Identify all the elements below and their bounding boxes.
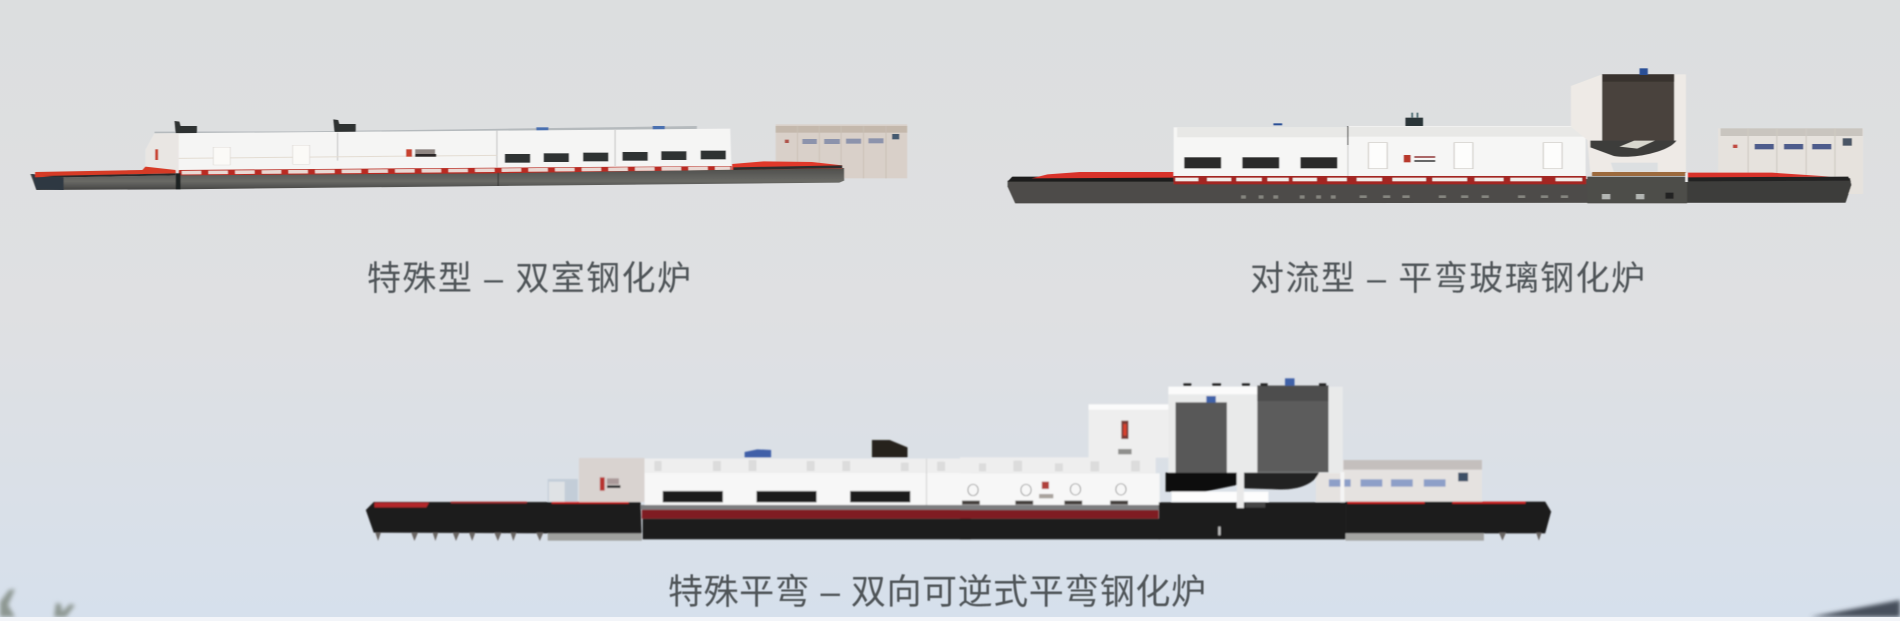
loading housing: [548, 479, 578, 502]
chamber doors: [1368, 143, 1562, 169]
quench tower casing: [1089, 378, 1344, 507]
furnace: convection: [1008, 68, 1863, 203]
door dials: [968, 484, 1126, 496]
control cabinet: [776, 124, 907, 178]
chamber windows: [1184, 157, 1337, 168]
blue fittings: [536, 126, 665, 131]
brand logo: [1404, 155, 1435, 162]
loading table, red top: [35, 167, 176, 177]
background roof, bottom right: [1810, 600, 1900, 617]
steel base: [1008, 178, 1851, 203]
quench base: [1159, 502, 1346, 539]
roof tabs: [979, 461, 1140, 471]
exhaust stack: [1405, 113, 1423, 126]
blue fittings: [1206, 396, 1216, 403]
unloading table: [1346, 502, 1551, 533]
red band with white tiles: [1174, 176, 1586, 184]
table feet: [375, 533, 543, 541]
white heating chamber: [145, 129, 731, 171]
roller openings: [1166, 473, 1237, 492]
steel base: [30, 168, 844, 190]
door logo: [1039, 482, 1053, 498]
caption: convection: 对流型 – 平弯玻璃钢化炉: [1250, 260, 1645, 298]
loading table, red top: [1008, 177, 1174, 182]
exhaust hood: [872, 440, 908, 457]
white chamber: [960, 473, 1160, 505]
white heating chamber: [1174, 127, 1348, 176]
white heating chamber: [645, 459, 971, 505]
chamber doors: [213, 147, 230, 165]
quench tower: [1571, 68, 1688, 203]
unloading table, red top: [732, 161, 842, 170]
bands: [960, 505, 1160, 510]
blue fitting: [1273, 123, 1282, 125]
caption: double chamber: 特殊型 – 双室钢化炉: [367, 260, 691, 298]
unloading table, red top: [1687, 173, 1831, 178]
dark fan housings: [1175, 402, 1227, 473]
chamber windows: [505, 151, 726, 163]
furnace: bidirectional reversible bending: [366, 378, 1551, 541]
caption: bidirectional reversible bending: 特殊平弯 – 双向可逆式平弯钢化炉: [668, 573, 1206, 612]
control cabinet: [1316, 460, 1482, 502]
chamber windows: [663, 491, 910, 502]
base indicator lights: [1241, 195, 1568, 199]
quench logo: [1118, 421, 1132, 454]
roof tabs: [654, 460, 945, 471]
blue fitting: [745, 449, 771, 457]
table feet: [1499, 533, 1542, 541]
exhaust stacks: [175, 119, 356, 135]
right half of furnace: [960, 378, 1551, 541]
red band: [179, 166, 731, 179]
left half of furnace: [366, 440, 971, 541]
bands: [641, 505, 971, 510]
furnace: double chamber: [30, 119, 907, 190]
loading table: [366, 502, 642, 540]
housing logo: [600, 477, 620, 491]
brand logo: [406, 149, 436, 157]
roof rail: [155, 126, 697, 135]
background foliage, bottom left: [0, 589, 75, 617]
bottom edge strip: [0, 617, 1900, 621]
top nubs: [1183, 383, 1326, 386]
control cabinet: [1718, 128, 1863, 194]
